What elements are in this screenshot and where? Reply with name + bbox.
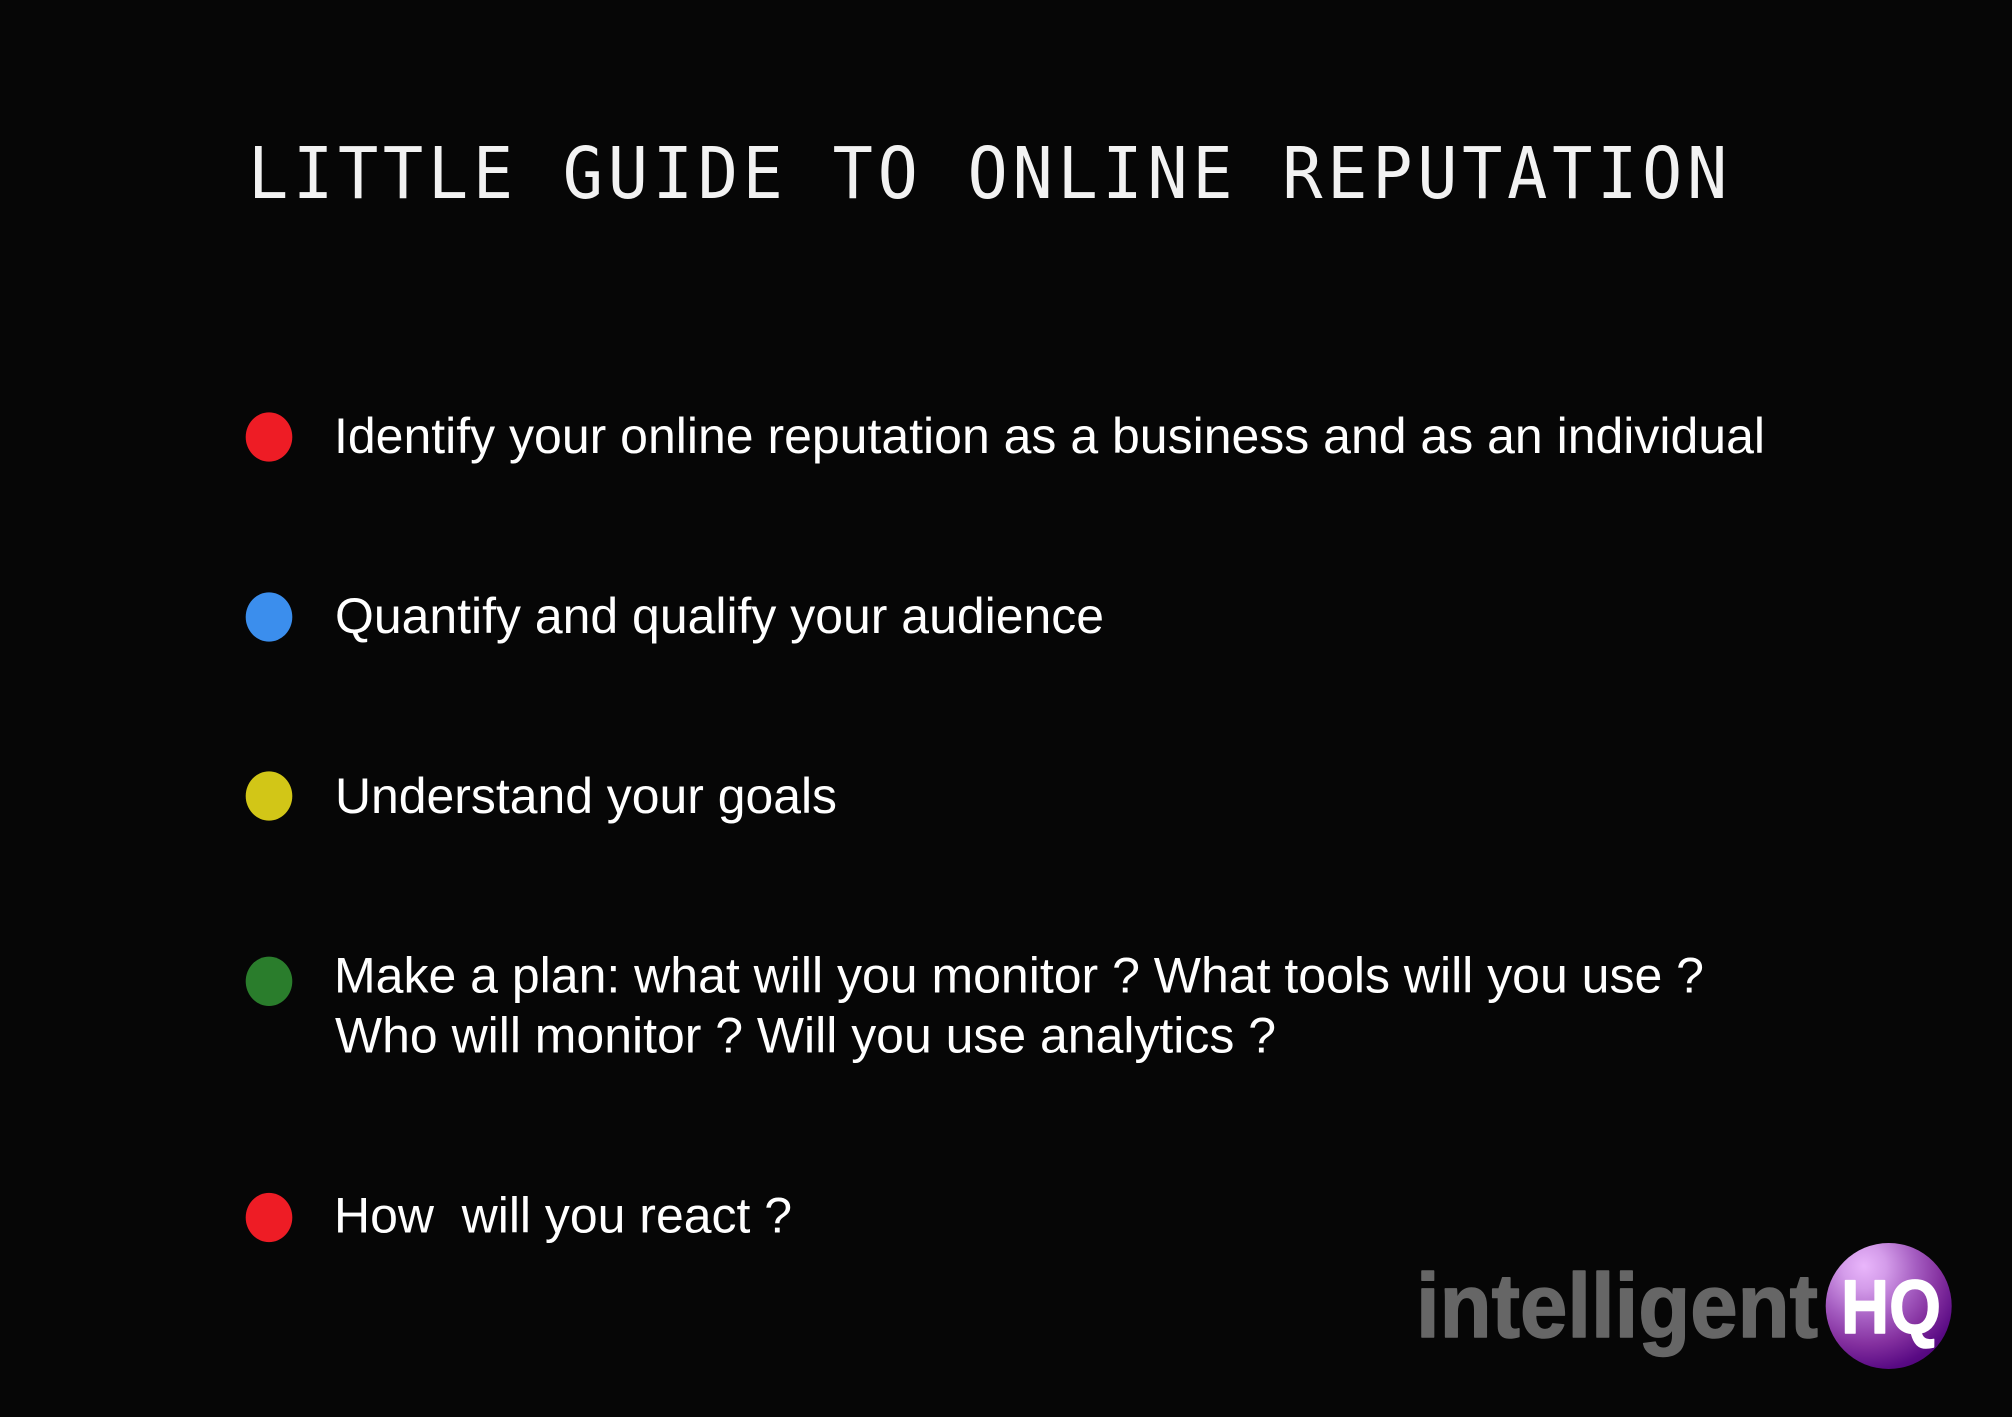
list item: understand goals: Understand your goals bbox=[335, 768, 837, 824]
list item: make a plan: Who will monitor ? Will you use analytics ? bbox=[335, 1008, 1276, 1064]
logo HQ letters: HQ bbox=[1841, 1265, 1941, 1350]
logo sphere bbox=[1826, 1243, 1952, 1369]
title: LITTLE GUIDE TO ONLINE REPUTATION bbox=[248, 132, 1732, 215]
logo wordmark: intelligent bbox=[1416, 1256, 1818, 1357]
list item: how will you react: How will you react ? bbox=[334, 1188, 792, 1244]
logo: intelligentHQ bbox=[1416, 1243, 1952, 1369]
list item: make a plan bbox=[246, 947, 1704, 1064]
list item: quantify audience: Quantify and qualify your audience bbox=[335, 588, 1104, 644]
list item: make a plan: Make a plan: what will you monitor ? What tools will you use ? bbox=[334, 947, 1704, 1003]
list item: identify reputation: Identify your online reputation as a business and as an individual bbox=[334, 408, 1765, 464]
